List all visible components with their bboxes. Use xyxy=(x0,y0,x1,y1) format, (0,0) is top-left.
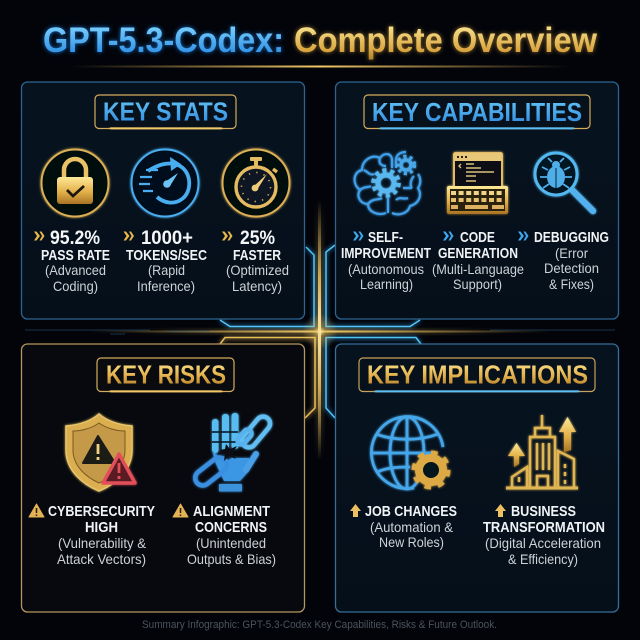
implication: job changes: New Roles) xyxy=(379,535,444,550)
icon: hand and broken chain xyxy=(192,413,273,492)
icon: chevrons xyxy=(124,232,134,240)
capability: debugging: DEBUGGING xyxy=(534,229,609,246)
capability: code generation: CODE xyxy=(460,229,495,246)
stat: pass rate: Coding) xyxy=(53,279,98,294)
icon: stopwatch xyxy=(222,150,290,216)
icon: code window and keyboard xyxy=(447,153,508,214)
risk: cybersecurity: (Vulnerability & xyxy=(58,536,146,551)
icon: chevrons xyxy=(353,232,364,240)
icon: up arrow xyxy=(495,504,506,517)
stat: pass rate xyxy=(34,228,110,294)
implication: job changes xyxy=(350,503,457,550)
icon: chevrons xyxy=(443,232,454,240)
capability: debugging: & Fixes) xyxy=(549,277,594,292)
capability: self-improvement: (Autonomous xyxy=(348,262,424,277)
stat: pass rate: (Advanced xyxy=(45,263,106,278)
panel: key risks xyxy=(22,344,304,612)
capability: self-improvement xyxy=(341,229,431,292)
heading: key implications: KEY IMPLICATIONS xyxy=(367,360,588,390)
title: Complete Overview xyxy=(294,21,598,60)
footer caption: Summary Infographic: GPT-5.3-Codex Key Capabilities, Risks & Future Outlook. xyxy=(142,619,497,631)
implication: business transformation: & Efficiency) xyxy=(508,552,578,567)
title: GPT-5.3-Codex: xyxy=(43,21,284,60)
icon: magnifier with bug xyxy=(535,153,593,211)
implication: business transformation: BUSINESS xyxy=(511,503,576,520)
title underline xyxy=(70,66,570,68)
heading: key stats: KEY STATS xyxy=(103,96,228,126)
connector frame and central cross xyxy=(25,200,615,460)
risk: cybersecurity: CYBERSECURITY xyxy=(48,503,155,520)
icon: brain with gears xyxy=(355,152,420,214)
risk: cybersecurity: HIGH xyxy=(85,519,118,536)
heading: key capabilities: KEY CAPABILITIES xyxy=(372,97,582,127)
risk: alignment: ALIGNMENT xyxy=(193,503,270,520)
icon: chevrons xyxy=(518,232,528,240)
icon: globe with gear xyxy=(371,417,448,489)
stat: tokens per second: 1000+ xyxy=(141,228,193,249)
stat: tokens per second: Inference) xyxy=(137,279,195,294)
capability: debugging: Detection xyxy=(544,261,599,276)
panel: key stats xyxy=(22,82,304,319)
capability: self-improvement: Learning) xyxy=(360,277,413,292)
icon: chevrons xyxy=(34,232,44,240)
implication: job changes: (Automation & xyxy=(370,520,453,535)
stat: faster: FASTER xyxy=(233,247,281,264)
stat: faster: Latency) xyxy=(232,279,282,294)
stat: faster: 25% xyxy=(240,228,275,249)
icon: city buildings with arrows xyxy=(506,415,578,488)
capability: code generation xyxy=(432,229,524,292)
capability: debugging: (Error xyxy=(555,246,588,261)
stat: tokens per second: (Rapid xyxy=(148,263,185,278)
implication: business transformation: (Digital Acceleration xyxy=(485,536,601,551)
icon: shield warning xyxy=(66,414,135,491)
icon: speed gauge xyxy=(132,150,198,216)
risk: cybersecurity: Attack Vectors) xyxy=(57,552,146,567)
icon: up arrow xyxy=(350,504,361,517)
risk: cybersecurity xyxy=(29,503,155,567)
risk: alignment: Outputs & Bias) xyxy=(187,552,276,567)
risk: alignment xyxy=(173,503,276,567)
capability: code generation: Support) xyxy=(453,277,502,292)
icon: padlock xyxy=(42,150,108,216)
icon: chevrons xyxy=(222,232,232,240)
icon: warning triangle xyxy=(173,504,188,517)
capability: self-improvement: SELF- xyxy=(368,229,403,246)
risk: alignment: CONCERNS xyxy=(195,519,267,536)
title: Complete Overview xyxy=(294,21,598,60)
implication: job changes: JOB CHANGES xyxy=(365,503,457,520)
capability: debugging xyxy=(518,229,609,292)
risk: alignment: (Unintended xyxy=(196,536,266,551)
stat: tokens per second: TOKENS/SEC xyxy=(126,247,207,264)
heading: key risks: KEY RISKS xyxy=(106,360,226,390)
capability: self-improvement: IMPROVEMENT xyxy=(341,245,431,262)
panel: key capabilities xyxy=(336,82,618,319)
title: GPT-5.3-Codex: xyxy=(43,21,284,60)
panel: key implications xyxy=(336,344,618,612)
title xyxy=(43,21,598,60)
implication: business transformation: TRANSFORMATION xyxy=(483,519,605,536)
stat: faster: (Optimized xyxy=(226,263,289,278)
stat: tokens per second xyxy=(124,228,207,294)
capability: code generation: (Multi-Language xyxy=(432,262,524,277)
stat: pass rate: PASS RATE xyxy=(41,247,110,264)
stat: pass rate: 95.2% xyxy=(50,228,100,249)
icon: warning triangle xyxy=(29,504,44,517)
capability: code generation: GENERATION xyxy=(438,245,518,262)
stat: faster xyxy=(222,228,289,294)
implication: business transformation xyxy=(483,503,605,567)
